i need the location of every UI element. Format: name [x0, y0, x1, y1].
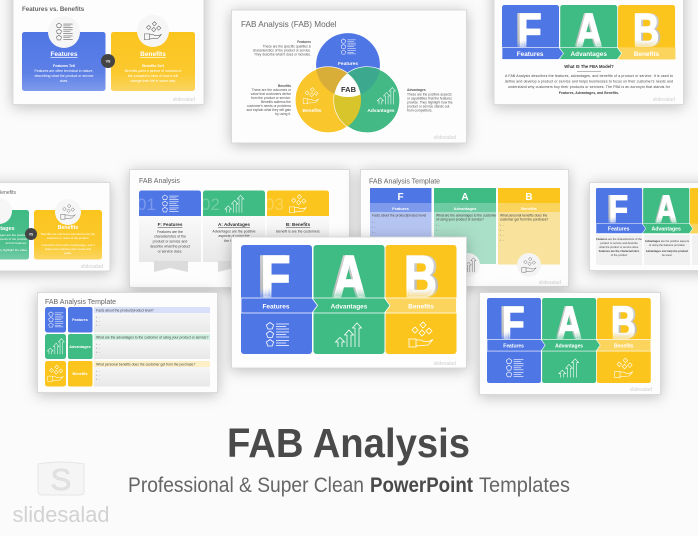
explanation text columns: Features are the characteristics — [599, 249, 640, 253]
vs badge: VS — [106, 60, 111, 64]
panel: venn diagram slide — [232, 10, 466, 143]
features card — [22, 16, 106, 91]
footer brand: slidesalad — [653, 97, 675, 103]
panel: FAB slide lower right — [480, 292, 660, 394]
icon badge: benefits — [517, 253, 541, 277]
column: advantages: A — [461, 192, 469, 203]
panel: cropped FAB text slide — [590, 182, 698, 270]
FAB matrix: F — [502, 297, 525, 349]
explanation text: What IS The FBA Model? — [564, 64, 614, 69]
slide heading: Features vs. Benefits — [22, 6, 85, 13]
column: features — [137, 190, 201, 272]
row: features — [45, 307, 210, 332]
slide heading: FAB Analysis (FAB) Model — [241, 20, 337, 29]
benefits card: Benefits — [140, 51, 166, 58]
benefits description: from the product or service. — [251, 96, 291, 100]
benefits description: customer's needs or problems — [247, 104, 291, 108]
FAB matrix: B — [613, 297, 638, 349]
column: features: • ... — [372, 220, 377, 224]
column: benefits: • ... — [500, 223, 505, 227]
venn chart: Advantages — [367, 108, 395, 114]
venn chart: Features — [338, 61, 358, 67]
explanation text columns: Advantages can help the product — [646, 249, 688, 253]
column: benefits: • ... — [500, 228, 505, 232]
column: features: 01 — [137, 195, 156, 214]
FAB matrix: F — [260, 244, 290, 310]
column: features: characteristics of the — [154, 234, 186, 238]
FAB matrix: F — [258, 244, 288, 310]
FAB letter blocks — [596, 188, 698, 234]
panel: cropped comparison slide — [0, 182, 110, 271]
row: benefits: Benefits — [73, 372, 87, 376]
column: advantages: • ... — [436, 228, 441, 232]
explanation text: Features, Advantages, and Benefits. — [559, 91, 619, 95]
vs badge: VS — [29, 232, 33, 236]
column: features: or service does. — [158, 250, 182, 254]
column: features: • ... — [372, 225, 377, 229]
benefits description: Benefits — [278, 84, 291, 88]
explanation text: define and develop a product or service and helps businesses to focus on their customer's needs and — [505, 80, 673, 84]
venn chart: FAB — [341, 85, 357, 94]
column: advantages — [434, 188, 497, 264]
row: advantages: • ... — [96, 342, 101, 346]
FAB letter blocks: Features — [608, 227, 630, 233]
features description: They describe what it does or includes. — [254, 52, 311, 56]
features card: Features are often technical in nature, — [35, 69, 94, 73]
row: benefits: What personal benefits does the customer get from the purchase? — [96, 362, 195, 366]
row: advantages: • ... — [96, 346, 101, 350]
advantages description: These are the positive aspects — [407, 92, 452, 96]
FAB letter blocks: Features — [517, 51, 544, 58]
explanation text columns: of using the features provided. — [649, 243, 685, 247]
FAB matrix: A — [333, 244, 366, 310]
FAB matrix: A — [331, 244, 364, 310]
FAB letter blocks: F — [518, 5, 542, 58]
features card: does. — [60, 79, 68, 83]
panel: FAB analysis columns slide — [130, 170, 350, 288]
column: advantages: of using your product or service? — [436, 218, 484, 222]
FAB matrix: B — [406, 244, 440, 310]
FAB matrix: B — [404, 244, 437, 310]
benefits card — [34, 199, 102, 260]
column: advantages: aspects of using the — [218, 234, 250, 238]
FAB matrix: Benefits — [408, 304, 434, 310]
explanation text columns: Advantages are the positive aspects — [645, 239, 690, 243]
explanation text columns: what the product or service does. — [599, 245, 639, 249]
column: benefits: B: Benefits — [286, 222, 311, 227]
features card: describing what the product or service — [35, 74, 94, 78]
column: advantages: What are the advantages to the customer — [436, 214, 497, 218]
column: advantages: A: Advantages — [218, 222, 250, 227]
FAB letter blocks: F — [607, 188, 626, 231]
venn chart — [295, 32, 400, 133]
column: benefits: • ... — [500, 233, 505, 237]
FAB matrix: Benefits — [614, 343, 634, 350]
row: benefits: • ... — [96, 377, 101, 381]
slide heading: FAB Analysis Template — [45, 299, 116, 306]
row: advantages: Advantages — [69, 345, 91, 349]
FAB matrix: A — [555, 297, 580, 349]
slide heading: FAB Analysis Template — [369, 178, 440, 186]
benefits description: These are the outcomes or — [252, 88, 292, 92]
benefits card: Benefits — [58, 225, 78, 231]
advantages description — [407, 88, 453, 112]
explanation text: understand why customers buy their products or services. The FBA is an acronym that stands for — [508, 85, 671, 89]
column: benefits: B — [525, 192, 533, 203]
explanation text columns — [596, 235, 698, 265]
benefits card: Benefits paint a picture of success in — [125, 69, 181, 73]
advantages card — [0, 198, 29, 260]
icon badge: advantages — [456, 253, 480, 277]
column: benefits: What personal benefits does the — [500, 214, 547, 218]
subtitle — [128, 473, 570, 497]
column: features: Features are the — [157, 230, 183, 234]
footer brand: slidesalad — [539, 280, 561, 286]
FAB letter blocks: F — [515, 5, 539, 58]
explanation text columns: be used. — [662, 253, 672, 257]
column: benefits: 03 — [265, 195, 284, 214]
features description: characteristics of the product or service. — [253, 48, 311, 52]
column: advantages: 02 — [201, 195, 220, 214]
column: features: Features — [392, 206, 410, 211]
column: advantages: the features. — [224, 239, 244, 243]
advantages description: Advantages — [407, 88, 426, 92]
subtitle: PowerPoint — [370, 473, 473, 497]
column: benefits: Benefit is are the customers — [276, 230, 320, 234]
footer brand: slidesalad — [434, 361, 456, 367]
column: features: Facts about the product/product level — [372, 214, 427, 218]
panel: FAB analysis template rows slide — [38, 292, 218, 392]
FAB matrix — [487, 297, 651, 383]
panel: features vs benefits slide — [13, 0, 204, 104]
FAB letter blocks: A — [655, 188, 676, 231]
FAB matrix — [241, 244, 456, 354]
features description — [253, 40, 312, 56]
FAB letter blocks: B — [635, 5, 661, 58]
row: features: Facts about the product/product level? — [96, 308, 154, 312]
row: features: • ... — [96, 323, 101, 327]
FAB matrix: Features — [503, 343, 524, 350]
column: features: • ... — [372, 230, 377, 234]
logo: slidesalad: slidesalad — [12, 502, 110, 527]
FAB letter blocks: A — [576, 5, 602, 58]
row: features: • ... — [96, 319, 101, 323]
row: advantages — [45, 334, 210, 359]
column: features: describe what the product — [150, 244, 190, 248]
benefits card: Benefits are outcomes experienced by the — [41, 232, 95, 236]
FAB matrix: Advantages — [331, 304, 368, 310]
FAB letter blocks: Benefits — [634, 51, 660, 58]
column: benefits: • ... — [500, 238, 505, 242]
FAB matrix: B — [611, 297, 636, 349]
vs badge — [101, 54, 115, 68]
FAB matrix: A — [557, 297, 582, 349]
column: advantages — [201, 190, 265, 272]
explanation text — [505, 64, 673, 95]
FAB letter blocks: B — [633, 5, 659, 58]
row: benefits — [45, 361, 210, 386]
column: advantages: Advantages are the positive — [212, 230, 256, 234]
benefits card: the prospect's mind of how it will — [128, 74, 178, 78]
row: advantages: What are the advantages to the customer of using your product or service? — [96, 336, 208, 340]
benefits description — [246, 84, 292, 116]
explanation text columns: product or service and describe — [600, 241, 638, 245]
column: benefits — [265, 190, 329, 262]
vs badge — [25, 228, 37, 240]
subtitle: Templates — [479, 473, 570, 497]
benefits description: by using it. — [275, 112, 291, 116]
panel: main FAB slide — [232, 237, 466, 368]
advantages card: and its features. — [6, 241, 27, 245]
subtitle: Professional & Super Clean — [128, 473, 364, 497]
logo: slidesalad — [12, 462, 110, 527]
panel: FAB template columns slide — [360, 170, 568, 286]
column: advantages: • ... — [436, 223, 441, 227]
venn chart: Benefits — [303, 108, 322, 114]
benefits card: A benefit is the result of advantage, and it — [41, 243, 95, 247]
panel: FAB explanation slide — [494, 0, 684, 104]
benefits card: Benefits Sell — [142, 64, 164, 68]
row: benefits: • ... — [96, 369, 101, 373]
benefits card — [111, 15, 195, 91]
advantages description: provide. They highlight how the — [407, 100, 453, 104]
explanation text columns: of the product — [611, 253, 627, 257]
FAB letter blocks: Advantages — [571, 51, 607, 58]
row: advantages: • ... — [96, 350, 101, 354]
advantages description: product or service stands out — [407, 104, 449, 108]
FAB letter blocks: A — [656, 188, 677, 231]
features card: Features — [50, 51, 78, 58]
explanation text: A FAB Analysis describes the features, advantages, and benefits of a product or service. It is used to — [505, 74, 673, 78]
column: features: F — [397, 192, 404, 203]
FAB matrix: Features — [262, 304, 290, 310]
column: benefits: customer get from the purchase? — [500, 218, 549, 222]
column: advantages: Advantages — [454, 206, 477, 211]
benefits description: value that customers derive — [251, 92, 291, 96]
benefits card: helps users achieve their needs and — [45, 247, 92, 251]
title: FAB Analysis — [227, 420, 470, 466]
logo: slidesalad: S — [51, 462, 71, 497]
advantages description: from competitors. — [407, 108, 433, 112]
column: features: product or service and — [153, 240, 187, 244]
footer brand: slidesalad — [81, 264, 103, 270]
advantages description: or capabilities that the features — [407, 96, 452, 100]
benefits card: goals. — [64, 251, 72, 255]
column: benefits — [498, 188, 560, 264]
slide heading: FAB Analysis — [139, 178, 180, 185]
features card: Features Tell — [53, 64, 75, 68]
features description: Features — [297, 40, 311, 44]
footer brand: slidesalad — [434, 135, 456, 141]
row: benefits: • ... — [96, 373, 101, 377]
column: features: F: Features — [158, 222, 183, 227]
FAB matrix: Advantages — [555, 343, 583, 350]
explanation text columns: Features are the characteristics of the — [596, 237, 642, 241]
column: benefits: Benefits — [521, 206, 538, 211]
column: features — [370, 188, 432, 264]
features description: These are the specific qualities & — [263, 44, 312, 48]
FAB matrix: F — [500, 297, 522, 349]
row: features: Features — [72, 318, 88, 322]
benefits card: customer or users of the product. — [47, 236, 89, 240]
benefits description: Benefits address the — [261, 100, 291, 104]
benefits description: and explain what they will gain — [246, 108, 291, 112]
FAB letter blocks: Advantages — [651, 227, 681, 233]
row: features: • ... — [96, 315, 101, 319]
footer brand: slidesalad — [630, 387, 652, 393]
FAB letter blocks: A — [574, 5, 601, 58]
FAB letter blocks: F — [609, 188, 628, 231]
benefits card: change their life in some way. — [130, 79, 176, 83]
footer brand: slidesalad — [173, 97, 195, 103]
FAB letter blocks — [502, 5, 675, 59]
